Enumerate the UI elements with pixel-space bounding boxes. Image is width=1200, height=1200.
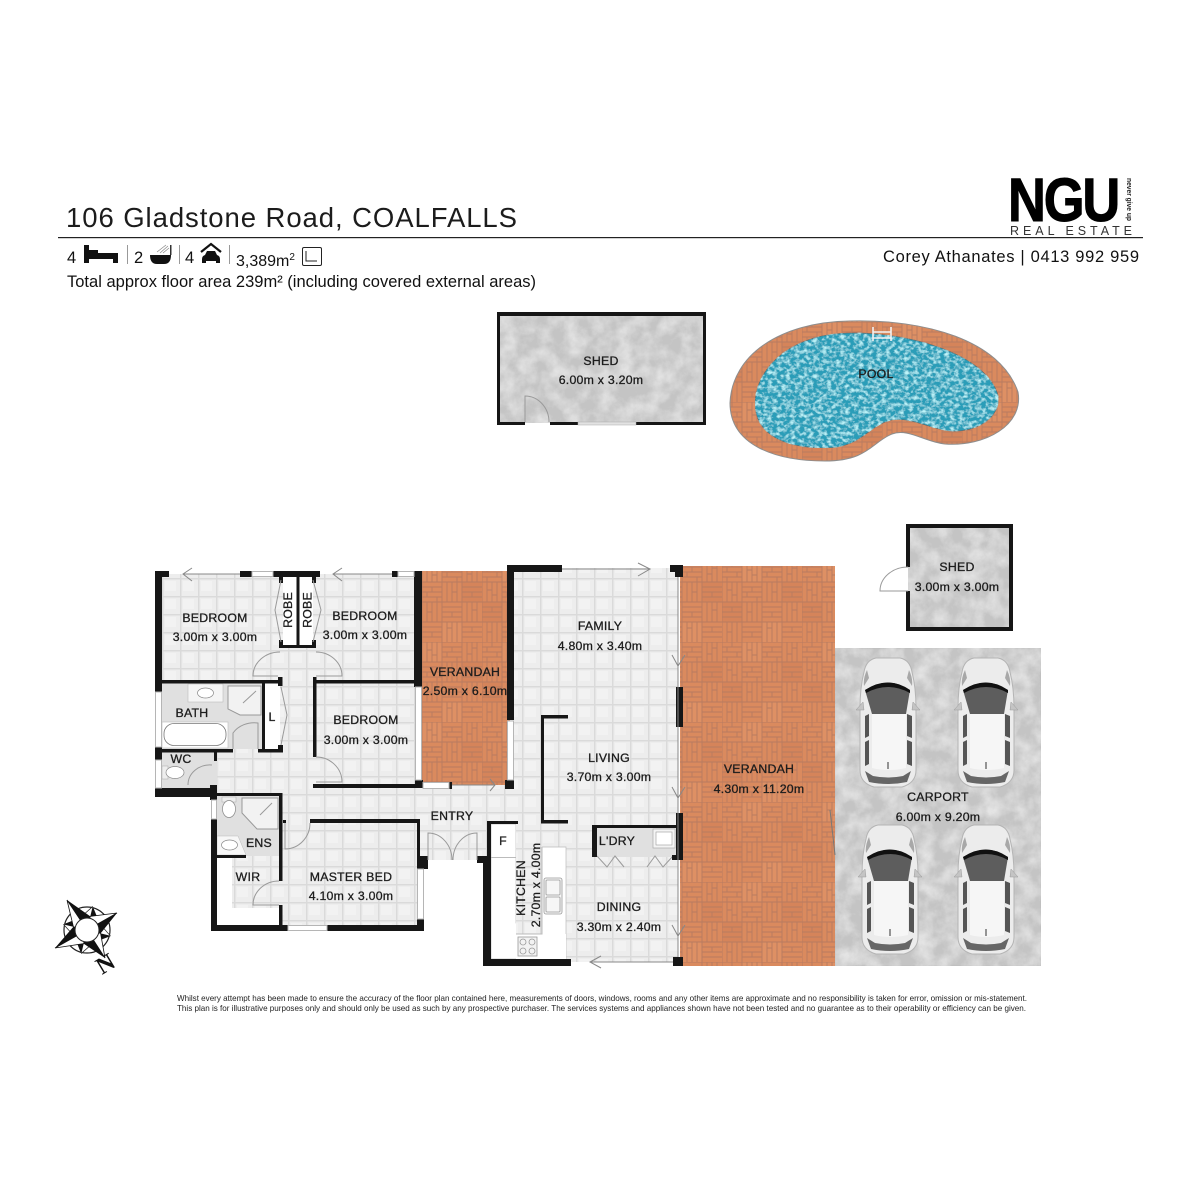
- room labels: 3.70m x 3.00m: [567, 770, 651, 784]
- logo: NGU Real Estate: REAL ESTATE: [1010, 224, 1132, 238]
- panel: main verandah: VERANDAH: [724, 762, 794, 776]
- room labels: MASTER BED: [310, 870, 392, 884]
- disclaimer: Whilst every attempt has been made to ensure the accuracy of the floor plan contained here, measurements of doors, windows, rooms and any other items are approximate and no responsibility is taken for error, omission or mis-statement.: [177, 994, 1027, 1003]
- room labels: BEDROOM: [332, 609, 398, 623]
- panel: WC fixtures: WC: [170, 752, 192, 766]
- title: 106 Gladstone Road, COALFALLS: [66, 202, 517, 233]
- panel: small shed: [880, 524, 1013, 631]
- panel: bathroom fixtures: BATH: [176, 706, 208, 720]
- floor area note: Total approx floor area 239m² (including covered external areas): [67, 273, 536, 291]
- car 2: [954, 658, 1018, 787]
- panel: wet area floors: [162, 683, 676, 857]
- panel: entry void: [428, 860, 477, 966]
- disclaimer: [177, 994, 1027, 1013]
- icon: garage car: [201, 244, 221, 263]
- panel: ensuite fixtures: ENS: [246, 836, 272, 850]
- room labels: 3.00m x 3.00m: [324, 733, 408, 747]
- room labels: 4.80m x 3.40m: [558, 639, 642, 653]
- room labels: LIVING: [588, 751, 630, 765]
- property stats row: 4: [67, 249, 76, 267]
- icon: compass rose: [55, 900, 117, 958]
- room labels: DINING: [597, 900, 641, 914]
- logo: NGU Real Estate: never give up: [1125, 178, 1132, 221]
- panel: kitchen: F: [499, 834, 507, 848]
- logo: NGU Real Estate: NGU: [1008, 166, 1118, 235]
- doors: [253, 580, 477, 905]
- panel: main verandah: 4.30m x 11.20m: [714, 782, 804, 796]
- panel: side verandah: [420, 571, 510, 785]
- room labels: ROBE: [281, 592, 295, 628]
- icon: bath: [150, 245, 172, 264]
- panel: storage areas: [217, 577, 313, 925]
- icon: pool ladder: [873, 327, 891, 341]
- panel: carport: 6.00m x 9.20m: [896, 810, 980, 824]
- icon: kitchen sink: [544, 878, 562, 914]
- floor tiles: [160, 568, 678, 966]
- panel: bathroom fixtures: [162, 684, 261, 749]
- panel: main verandah: [680, 566, 835, 966]
- panel: carport: [835, 648, 1041, 966]
- disclaimer: This plan is for illustrative purposes only and should only be used as such by any prospective purchaser. The services systems and appliances shown have not been tested and no guarantee as to their operability or efficiency can be given.: [177, 1004, 1026, 1013]
- room labels: BEDROOM: [333, 713, 399, 727]
- icon: cooktop: [518, 937, 537, 956]
- icon: north marker: N: [92, 949, 121, 980]
- property stats row: 4: [185, 249, 194, 267]
- panel: kitchen: 2.70m x 4.00m: [529, 843, 543, 927]
- icon: bed: [84, 245, 118, 263]
- room labels: WIR: [236, 870, 260, 884]
- panel: pool: POOL: [858, 367, 894, 381]
- property stats row: 3,389m: [236, 253, 289, 270]
- panel: WC fixtures: [162, 752, 212, 785]
- panel: laundry fixtures: L'DRY: [599, 834, 635, 848]
- car 1: [856, 658, 920, 787]
- panel: large shed: [497, 312, 706, 425]
- panel: small shed: SHED: [939, 560, 975, 574]
- room labels: ENTRY: [431, 809, 473, 823]
- room labels: 3.00m x 3.00m: [323, 628, 407, 642]
- panel: large shed: 6.00m x 3.20m: [559, 373, 643, 387]
- agent contact: Corey Athanates | 0413 992 959: [883, 248, 1139, 266]
- header rule: [58, 237, 1143, 238]
- room labels: [173, 592, 661, 934]
- room labels: 3.30m x 2.40m: [577, 920, 661, 934]
- room labels: FAMILY: [578, 619, 622, 633]
- room labels: 3.00m x 3.00m: [173, 630, 257, 644]
- panel: kitchen: KITCHEN: [514, 860, 528, 916]
- walls: [155, 565, 683, 966]
- property stats row: [67, 244, 322, 270]
- windows: [156, 572, 514, 930]
- property stats row: 2: [134, 249, 143, 267]
- car 4: [954, 825, 1018, 954]
- property stats row: 2: [289, 252, 295, 263]
- room labels: 2.50m x 6.10m: [423, 684, 507, 698]
- panel: small shed: 3.00m x 3.00m: [915, 580, 999, 594]
- room labels: BEDROOM: [182, 611, 248, 625]
- panel: carport: CARPORT: [907, 790, 969, 804]
- room labels: VERANDAH: [430, 665, 500, 679]
- panel: laundry fixtures: [597, 829, 675, 867]
- room labels: ROBE: [300, 592, 314, 628]
- panel: kitchen: [491, 824, 566, 959]
- sliding door tracks and arrows: [183, 563, 685, 968]
- icon: land area: [302, 248, 322, 266]
- room labels: 4.10m x 3.00m: [309, 889, 393, 903]
- panel: pool: [730, 321, 1019, 461]
- panel: large shed: SHED: [583, 354, 619, 368]
- panel: ensuite fixtures: [217, 797, 278, 855]
- room labels: L: [268, 710, 276, 724]
- car 3: [858, 825, 922, 954]
